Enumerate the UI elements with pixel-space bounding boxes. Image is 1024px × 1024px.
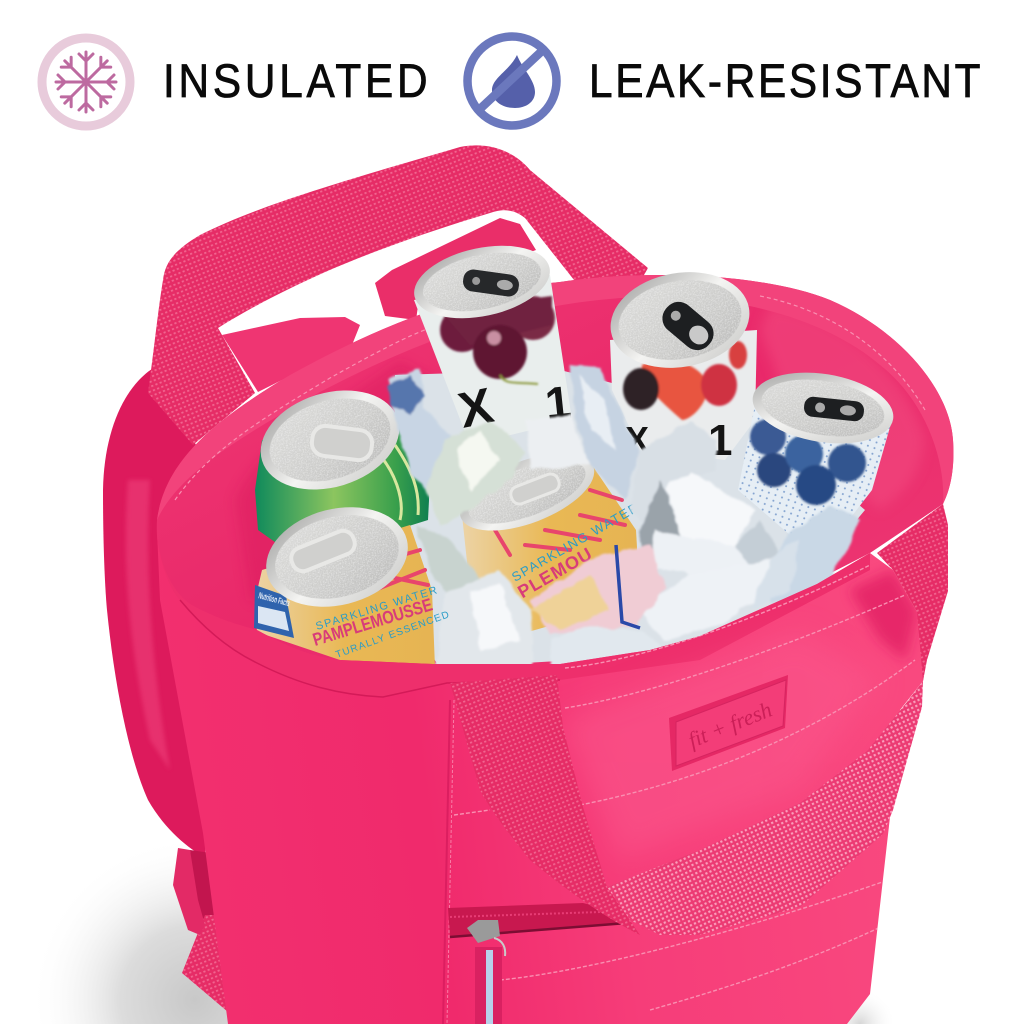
badge: insulated bbox=[42, 38, 130, 126]
can text: SPARKLING WATER bbox=[314, 584, 440, 633]
zipper pull tag bbox=[475, 947, 502, 1024]
ice: left tall bbox=[570, 365, 640, 500]
center highlight bbox=[570, 646, 852, 848]
fold line bbox=[180, 600, 560, 697]
can logo: 1 bbox=[708, 416, 732, 465]
blackberry bbox=[623, 368, 659, 410]
ice: bottom bbox=[550, 625, 665, 668]
pull tab bbox=[656, 296, 720, 356]
can text: essences: TURALLY ESSENCED bbox=[334, 609, 452, 661]
pull tab bbox=[803, 396, 865, 422]
shadow under strap right bbox=[850, 570, 917, 660]
raspberry bbox=[701, 364, 737, 406]
rim seam stitching bbox=[175, 296, 925, 500]
pull tab bbox=[310, 424, 374, 462]
can label seen through ice bbox=[616, 545, 640, 628]
can text: SPARKLING WATER bbox=[509, 499, 642, 585]
lip band bbox=[257, 553, 870, 680]
can logo: X bbox=[454, 377, 498, 439]
ice: center top bbox=[425, 420, 525, 525]
lid inner bbox=[461, 447, 593, 537]
strap bottom half bbox=[607, 681, 923, 935]
seam bbox=[443, 700, 450, 1024]
front panel details bbox=[157, 530, 917, 1024]
back panel highlight bbox=[126, 480, 170, 770]
can flames bbox=[495, 490, 625, 555]
ice: front bbox=[435, 570, 535, 668]
back pad left bbox=[222, 317, 360, 392]
lid inner bbox=[266, 503, 408, 611]
can text: pamplemousse: PAMPLEMOUSSE bbox=[310, 594, 435, 650]
lower back strap bbox=[182, 915, 240, 1012]
lid inner bbox=[612, 271, 748, 369]
ice: lower left bbox=[415, 525, 480, 600]
pull tab bbox=[508, 472, 562, 506]
floor shadow bbox=[30, 835, 900, 1024]
front strap bbox=[450, 504, 948, 935]
ice: top slab bbox=[525, 415, 590, 470]
logo text: fit + fresh bbox=[685, 696, 775, 753]
back panel bbox=[103, 367, 225, 857]
icon: snowflake bbox=[56, 52, 116, 112]
can lid bbox=[256, 493, 418, 621]
can text: PLEMOU bbox=[514, 543, 596, 602]
can lid bbox=[450, 438, 604, 546]
lid inner bbox=[758, 372, 888, 444]
ice cubes bbox=[388, 365, 860, 668]
can lid bbox=[407, 234, 557, 330]
can nutrition label bbox=[254, 585, 294, 638]
can lid bbox=[603, 262, 757, 378]
can: green bbox=[248, 374, 430, 560]
interior lining bbox=[157, 275, 953, 670]
quilt stitches bbox=[454, 565, 915, 1010]
ice: upper left bbox=[390, 370, 455, 510]
strap left half bbox=[450, 675, 640, 935]
ice: right large bbox=[770, 505, 860, 605]
pull tab bbox=[288, 528, 358, 574]
pull tab bbox=[462, 268, 520, 298]
interior shading bbox=[235, 360, 470, 620]
can lid bbox=[248, 374, 412, 506]
seam stitch bbox=[447, 700, 454, 1024]
zipper bbox=[448, 903, 627, 1024]
icon: ring bbox=[42, 38, 130, 126]
back pad center bbox=[375, 218, 536, 320]
badge: leak-resistant bbox=[468, 36, 556, 126]
can: berry: X bbox=[625, 419, 649, 460]
interior highlight bbox=[760, 305, 925, 510]
strawberry bbox=[642, 360, 708, 420]
can: berry bbox=[603, 262, 757, 465]
can flames bbox=[375, 550, 428, 590]
cherries bbox=[440, 296, 555, 384]
icon: no sign bbox=[468, 36, 556, 126]
zipper slider bbox=[467, 920, 500, 943]
ice: pink over can bbox=[530, 545, 665, 635]
top handle bbox=[148, 145, 648, 445]
back buckle flap bbox=[173, 848, 205, 935]
can: cherry: 1 bbox=[543, 376, 573, 430]
can: blueberry bbox=[738, 363, 898, 535]
lid inner bbox=[418, 243, 546, 321]
can: cherry bbox=[407, 234, 573, 445]
ice mass background bbox=[395, 370, 865, 668]
strap right top bbox=[877, 504, 948, 681]
logo patch bbox=[669, 675, 788, 771]
rim back band bbox=[157, 275, 953, 520]
heading: leak-resistant: LEAK-RESISTANT bbox=[589, 56, 981, 108]
front panel bbox=[157, 530, 927, 1024]
heading: insulated: INSULATED bbox=[163, 56, 428, 108]
can lid bbox=[748, 363, 898, 453]
bag illustration bbox=[103, 145, 953, 1024]
back buckle dark section bbox=[190, 850, 228, 930]
lid inner bbox=[259, 385, 401, 495]
can: pamplemousse center bbox=[450, 438, 652, 640]
ice: mid right bbox=[630, 420, 715, 530]
can nutrition label: Nutrition Facts bbox=[257, 590, 291, 608]
icon: drop bbox=[492, 55, 535, 108]
can: pamplemousse left bbox=[254, 493, 452, 668]
